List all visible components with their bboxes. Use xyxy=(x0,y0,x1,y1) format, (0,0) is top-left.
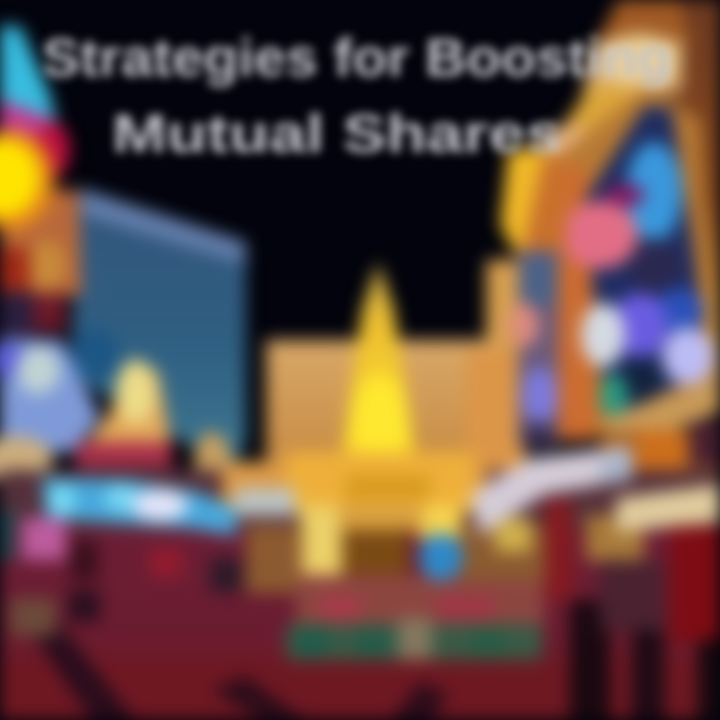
crowd: dark silhouettes xyxy=(10,500,720,720)
building: central golden hotel xyxy=(266,260,526,480)
floor: red street xyxy=(0,530,720,720)
title: Mutual Shares xyxy=(112,104,562,164)
sign: green table band xyxy=(286,618,542,660)
icon: blue lamp xyxy=(419,533,463,581)
glow: plaza lights xyxy=(222,452,644,627)
building: small gold facade xyxy=(76,358,230,488)
building: blue glass tower xyxy=(70,188,246,470)
panel: colourful sign left xyxy=(0,26,100,484)
panel: large billboard right xyxy=(500,0,720,472)
banner: right light strip xyxy=(470,446,720,535)
banner: left light strip xyxy=(0,478,295,560)
lower backdrop xyxy=(0,470,720,570)
title: Strategies for Boosting xyxy=(42,28,672,88)
tower: illuminated spire xyxy=(340,262,418,475)
title xyxy=(42,28,672,164)
